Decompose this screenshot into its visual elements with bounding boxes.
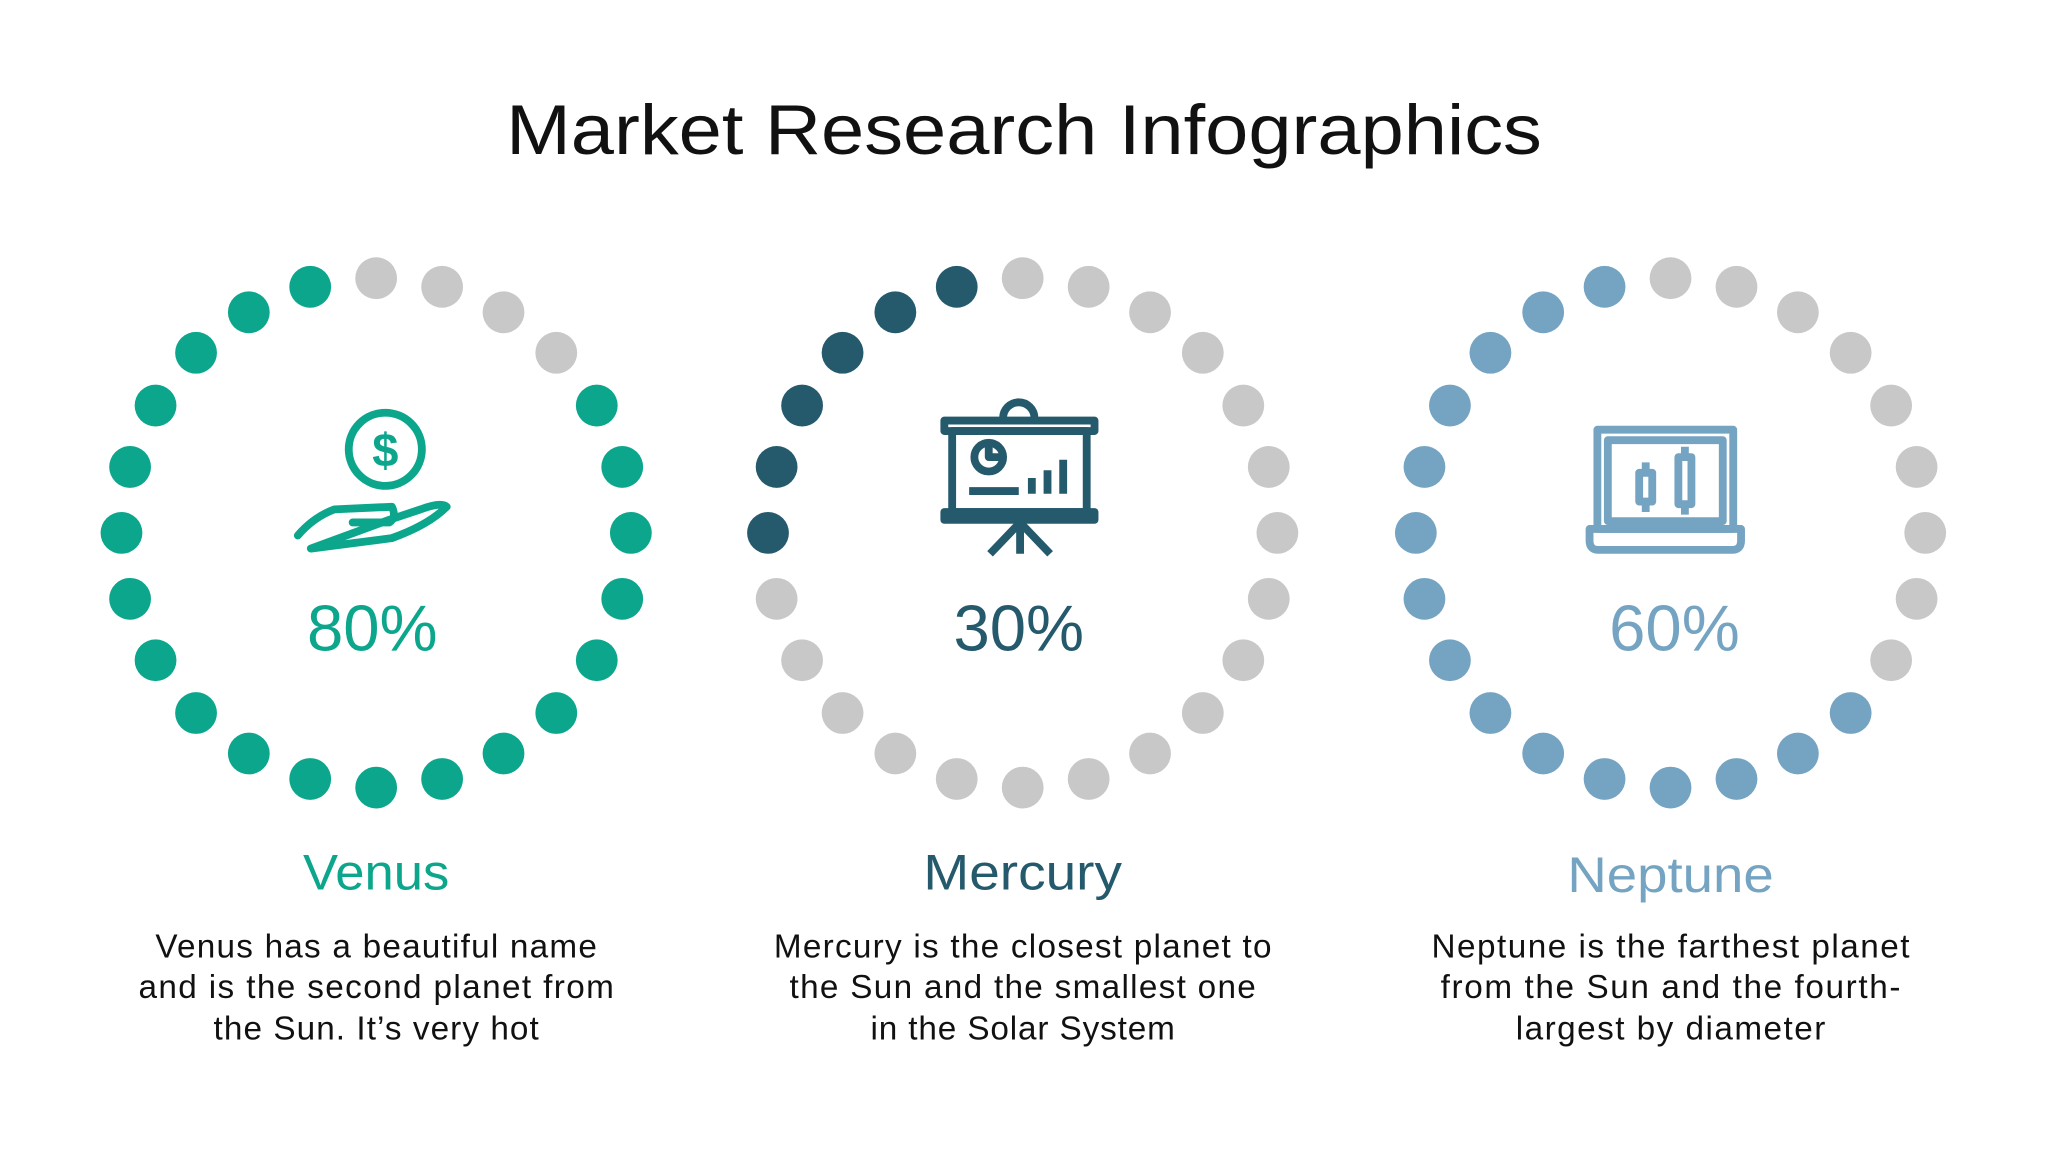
dot ring: venus 80% [101, 257, 652, 808]
panel: venus [101, 257, 652, 1048]
percent: 80%: 80% [307, 591, 438, 664]
dot ring: mercury 30% [747, 257, 1298, 808]
icon: hand with coin [298, 413, 447, 549]
icon: laptop with chart [1590, 430, 1741, 550]
heading: Venus: Venus [303, 844, 449, 900]
dot ring: neptune 60% [1395, 257, 1946, 808]
text: neptune description: Neptune is the farthest planet [1432, 928, 1910, 965]
text: mercury description: Mercury is the closest planet to [774, 928, 1272, 965]
text: neptune description: largest by diameter [1516, 1011, 1825, 1048]
panel: mercury [747, 257, 1298, 1048]
title: Market Research Infographics [506, 90, 1542, 169]
percent: 60%: 60% [1609, 591, 1740, 664]
text: mercury description: in the Solar System [871, 1011, 1175, 1048]
text: venus description: and is the second planet from [138, 969, 614, 1006]
panel: neptune [1395, 257, 1946, 1048]
icon: presentation board [944, 402, 1095, 554]
text: venus description: Venus has a beautiful name [155, 928, 597, 965]
text: venus description: the Sun. It’s very hot [214, 1011, 539, 1048]
text: mercury description: the Sun and the smallest one [790, 969, 1256, 1006]
text: neptune description: from the Sun and the fourth- [1441, 969, 1900, 1006]
icon: hand with coin: $ [372, 423, 398, 476]
heading: Mercury: Mercury [923, 844, 1122, 900]
percent: 30%: 30% [953, 591, 1084, 664]
heading: Neptune: Neptune [1567, 847, 1774, 903]
